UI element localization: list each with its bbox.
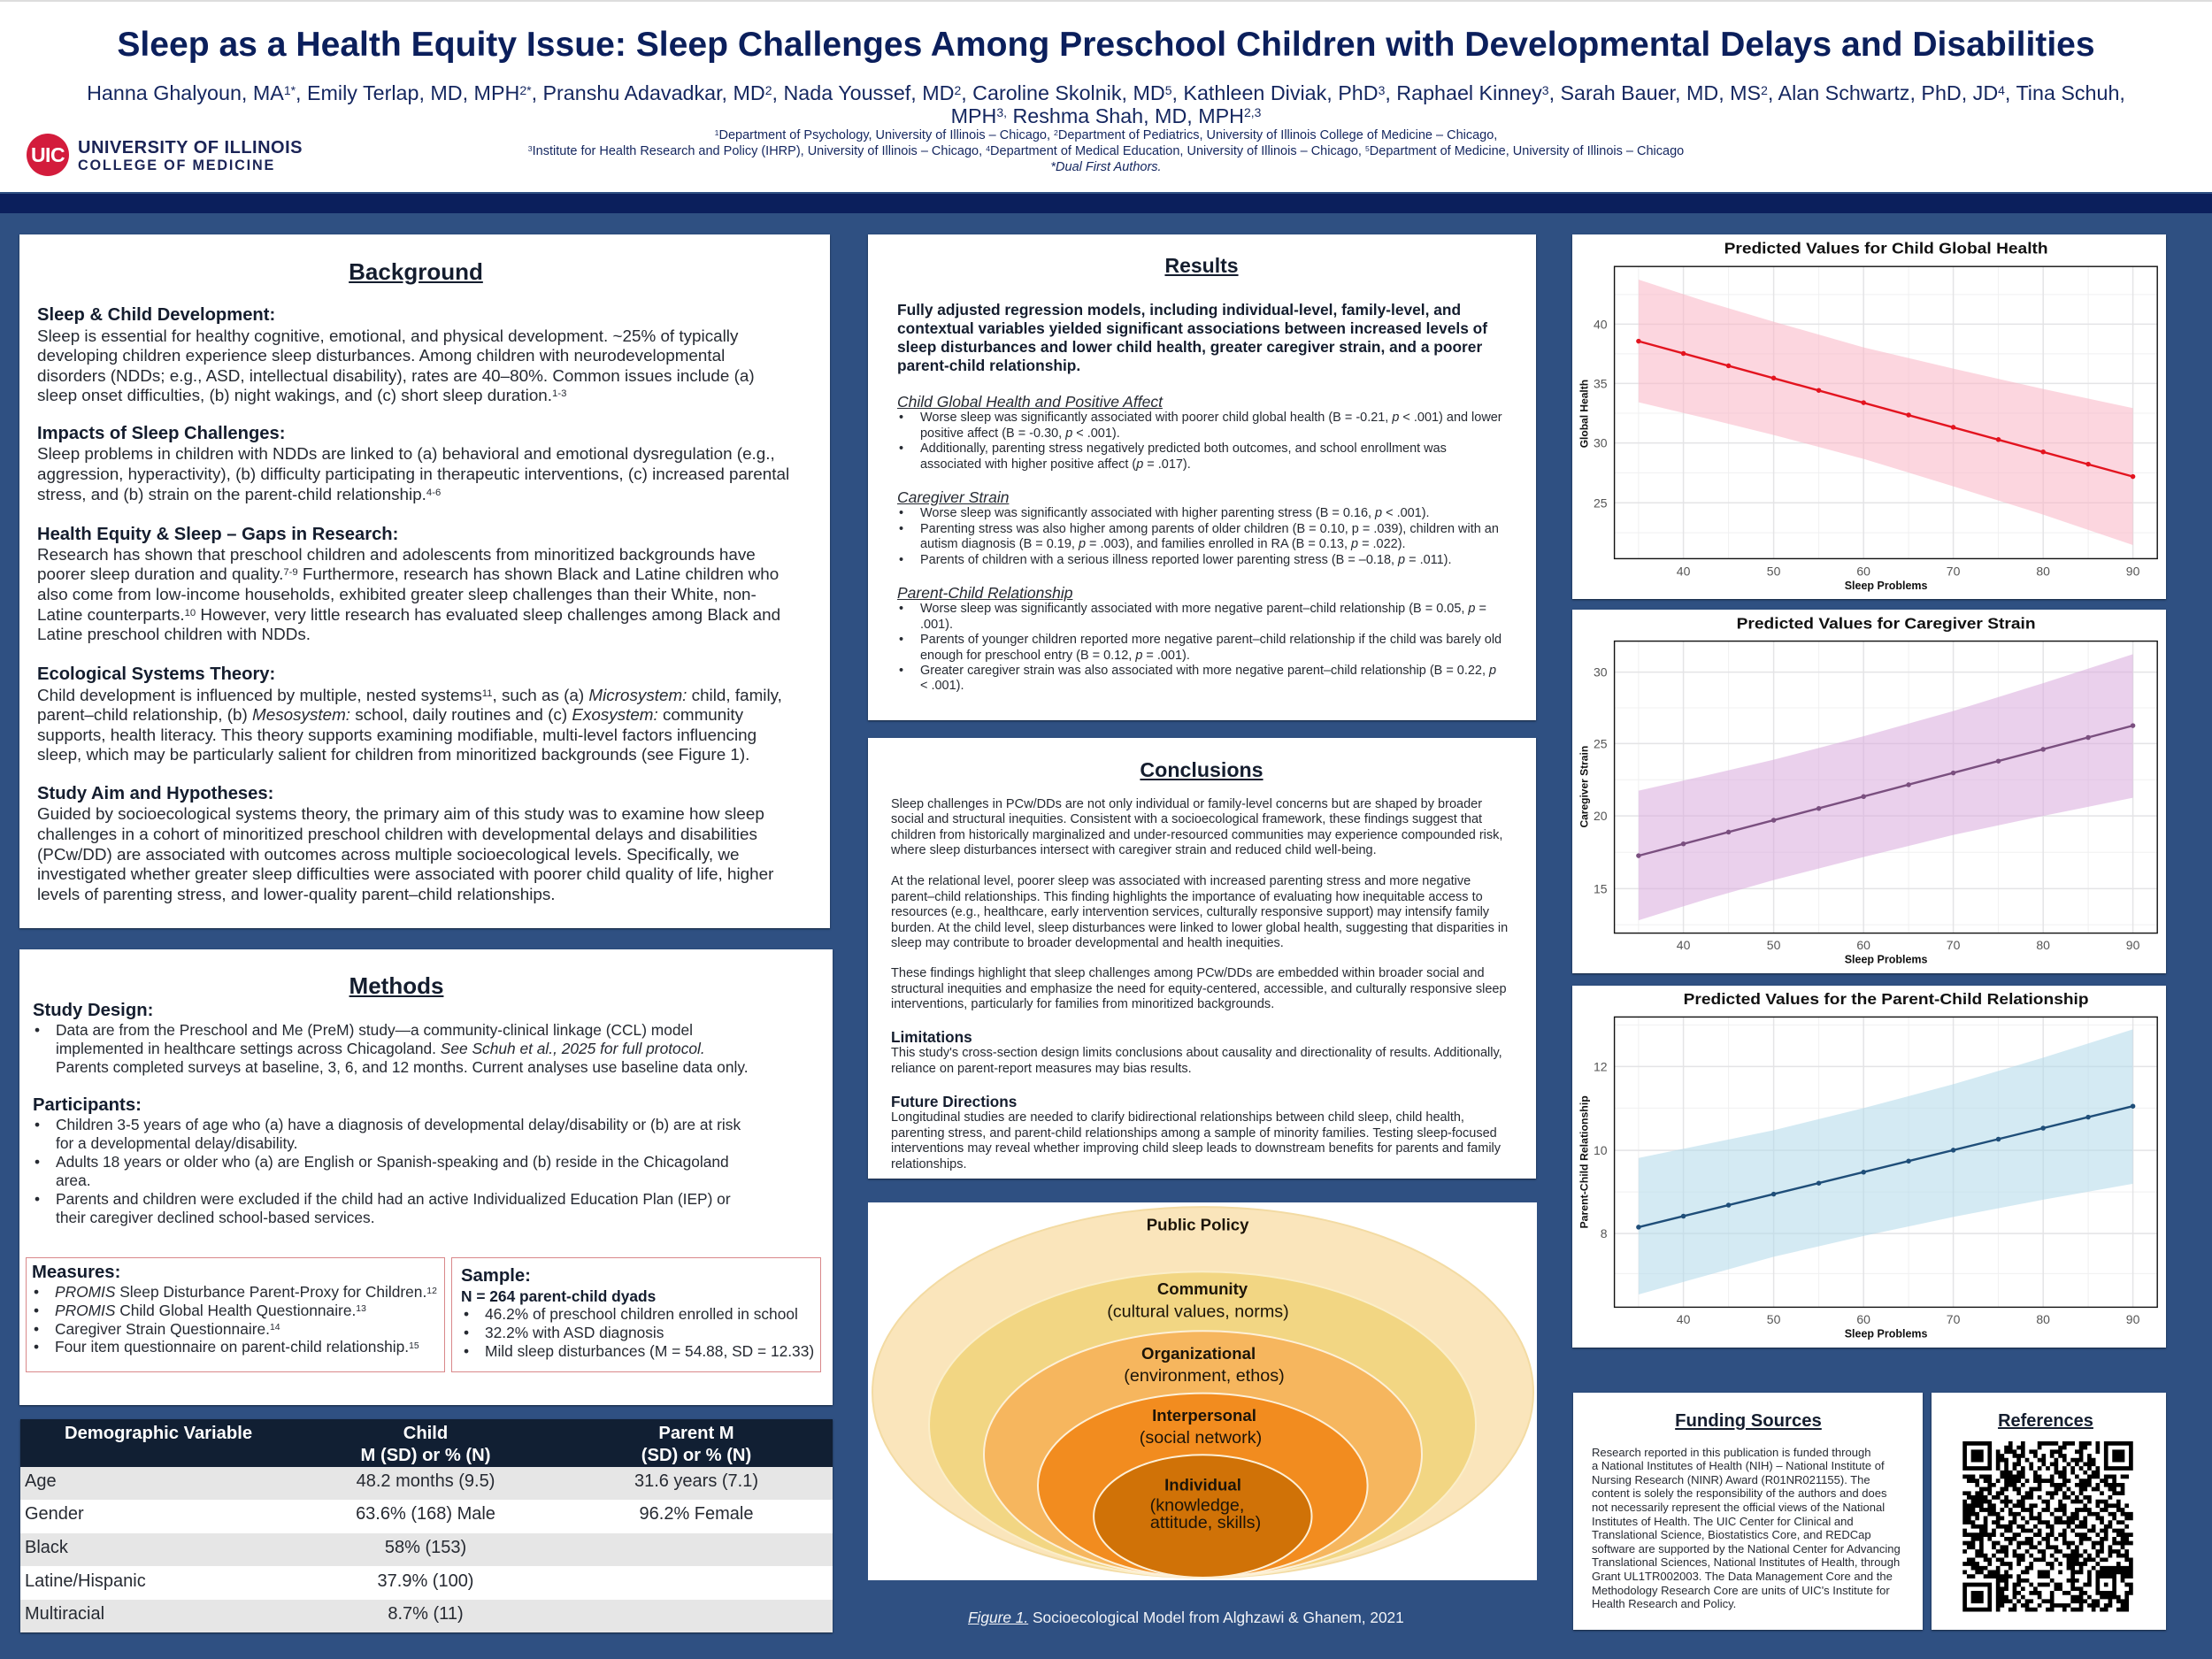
- text: participants: Parents and children were excluded if the child had an active Individualized Education Plan (IEP) or: [56, 1190, 731, 1208]
- box: measures: •: [34, 1320, 39, 1338]
- text: child global health findings: Worse sleep was significantly associated with poorer child global health (B = -0.21, p < .001) and lower: [920, 411, 1502, 425]
- panel: results: •: [899, 633, 903, 647]
- box: sample: •: [464, 1342, 469, 1360]
- panel: results: •: [899, 506, 903, 520]
- header band: [0, 0, 2212, 192]
- text: caregiver strain findings: Parenting stress was also higher among parents of older children (B = 0.10, p = .039), children with an: [920, 522, 1499, 536]
- text: results summary: sleep disturbances and lower child health, greater caregiver strain, and a poorer: [897, 338, 1482, 356]
- row: gender: 63.6% (168) Male: [356, 1504, 495, 1524]
- y axis title: Caregiver Strain: [1578, 746, 1591, 828]
- subheading: parent-child relationship: Parent-Child Relationship: [897, 584, 1072, 602]
- box: sample: •: [464, 1324, 469, 1341]
- text: parent-child findings: Greater caregiver strain was also associated with more negative parent–child relationship (B = 0.22, p: [920, 664, 1496, 678]
- panel: results: •: [899, 553, 903, 567]
- chart: parent-child relationship: [1572, 986, 2166, 1348]
- text: measures list: Four item questionnaire on parent-child relationship.15: [55, 1338, 419, 1356]
- text: conclusions paragraph 2: [891, 874, 1508, 950]
- text: sleep and child development: [37, 326, 755, 404]
- text: ecological systems: sleep, which may be particularly salient for children from minoritized backgrounds (see Figure 1).: [37, 745, 749, 764]
- ellipse: organizational: Organizational: [1141, 1344, 1256, 1363]
- chart: caregiver strain: [1572, 610, 2166, 973]
- box: measures: •: [34, 1338, 39, 1356]
- text: participants: Adults 18 years or older who (a) are English or Spanish-speaking and (b) reside in the Chicagoland: [56, 1153, 729, 1171]
- text: sample list: Mild sleep disturbances (M = 54.88, SD = 12.33): [485, 1342, 814, 1360]
- text: caregiver strain findings: autism diagnosis (B = 0.19, p = .003), and families enrolled in RA (B = 0.13, p = .022).: [920, 537, 1406, 551]
- text: sample list: [464, 1305, 814, 1360]
- text: participants: Children 3-5 years of age who (a) have a diagnosis of developmental delay/disability or (b) are at risk: [56, 1116, 741, 1133]
- y axis labels: 12: [1594, 1059, 1608, 1073]
- x axis labels: 80: [2037, 938, 2051, 952]
- subheading: study design: Study Design:: [33, 1001, 153, 1020]
- text: future directions: [891, 1110, 1501, 1171]
- y axis labels: 35: [1594, 377, 1608, 391]
- subheading: sleep and child development: Sleep & Child Development:: [37, 305, 275, 325]
- text: sleep and child development: Sleep is essential for healthy cognitive, emotional, and physical development. ~25% of typically: [37, 326, 738, 345]
- x axis title: Sleep Problems: [1845, 580, 1928, 592]
- text: conclusions paragraph 2: At the relational level, poorer sleep was associated with increased parenting stress and more negative: [891, 874, 1471, 888]
- text: future directions: relationships.: [891, 1157, 967, 1171]
- text: limitations: reliance on parent-report measures may bias results.: [891, 1062, 1192, 1076]
- text: funding: Health Research and Policy.: [1592, 1597, 1736, 1610]
- text: caregiver strain findings: [899, 506, 1499, 567]
- ellipse: individual: Individual: [1164, 1476, 1241, 1494]
- gridlines: [1615, 267, 2157, 558]
- text: measures list: PROMIS Child Global Health Questionnaire.13: [55, 1302, 366, 1319]
- x axis title: Sleep Problems: [1845, 954, 1928, 966]
- x axis labels: 80: [2037, 1312, 2051, 1326]
- text: results summary: [897, 301, 1488, 374]
- subheading: child global health: Child Global Health and Positive Affect: [897, 393, 1163, 411]
- text: future directions: interventions may reveal whether improving child sleep leads to downstream benefits for parents and family: [891, 1141, 1501, 1156]
- x axis labels: 70: [1947, 938, 1961, 952]
- panel: results: •: [899, 522, 903, 536]
- text: future directions: Longitudinal studies are needed to clarify bidirectional relationships between child sleep, child health,: [891, 1110, 1464, 1125]
- affiliations: 1Department of Psychology, University of Illinois – Chicago, 2Department of Pediatrics, University of Illinois College of Medicine – Chicago,: [715, 128, 1497, 142]
- subheading: study aim: Study Aim and Hypotheses:: [37, 784, 273, 803]
- regression line: [1639, 1106, 2133, 1226]
- text: sleep and child development: disorders (NDDs; e.g., ASD, intellectual disability), rates are 40–80%. Common issues include (a): [37, 366, 755, 385]
- text: parent-child findings: .001).: [920, 618, 953, 632]
- text: ecological systems: Child development is influenced by multiple, nested systems11, such as (a) Microsystem: child, family,: [37, 686, 782, 704]
- heading: conclusions: Conclusions: [1140, 758, 1263, 781]
- x axis labels: 50: [1767, 938, 1781, 952]
- text: study aim: levels of parenting stress, and lower-quality parent–child relationships.: [37, 885, 556, 903]
- row: black: Black: [25, 1538, 68, 1557]
- panel: results: •: [899, 602, 903, 616]
- row: latine: 37.9% (100): [378, 1571, 473, 1591]
- text: measures list: Caregiver Strain Questionnaire.14: [55, 1320, 280, 1338]
- x axis labels: 50: [1767, 1312, 1781, 1326]
- text: caregiver strain findings: Worse sleep was significantly associated with higher parenting stress (B = 0.16, p < .001).: [920, 506, 1430, 520]
- text: study design: [35, 1021, 749, 1076]
- text: funding: Institutes of Health. The UIC Center for Clinical and: [1592, 1515, 1854, 1528]
- text: conclusions paragraph 3: These findings highlight that sleep challenges among PCw/DDs are embedded within broader social and: [891, 966, 1485, 980]
- confidence band: [1639, 280, 2133, 545]
- row: gender: Gender: [25, 1504, 84, 1524]
- row: black: [20, 1533, 833, 1566]
- affiliations: 3Institute for Health Research and Policy (IHRP), University of Illinois – Chicago, 4Department of Medical Education, University of Illinois – Chicago, 5Department of Medicine, University of Illinois – Chicago: [528, 144, 1684, 158]
- caption: figure 1: Figure 1. Socioecological Model from Alghzawi & Ghanem, 2021: [968, 1609, 1404, 1626]
- text: measures list: [34, 1283, 437, 1356]
- text: funding: content is solely the responsibility of the authors and does: [1592, 1486, 1887, 1500]
- text: funding: not necessarily represent the official views of the National: [1592, 1501, 1885, 1514]
- y axis labels: [1594, 665, 1608, 896]
- plot frame: [1615, 267, 2158, 559]
- panel: methods: •: [35, 1153, 40, 1171]
- ellipse: individual: (knowledge,: [1150, 1496, 1244, 1516]
- ellipse: organizational: [984, 1332, 1422, 1578]
- logo wordmark line 2: COLLEGE OF MEDICINE: [78, 157, 275, 173]
- x axis title: Sleep Problems: [1845, 1327, 1928, 1340]
- chart title: Predicted Values for Caregiver Strain: [1737, 615, 2036, 633]
- table header: M (SD) or % (N): [361, 1446, 490, 1465]
- y axis labels: 15: [1594, 882, 1608, 896]
- text: parent-child findings: < .001).: [920, 679, 964, 693]
- text: child global health findings: [899, 411, 1502, 472]
- subheading: measures: Measures:: [32, 1263, 120, 1282]
- ellipse: interpersonal: [1038, 1394, 1368, 1578]
- heading: methods: Methods: [349, 972, 443, 999]
- text: funding: a National Institutes of Health (NIH) – National Institute of: [1592, 1459, 1885, 1472]
- panel: methods: [19, 949, 833, 1405]
- ellipse: interpersonal: (social network): [1140, 1428, 1262, 1448]
- text: study aim: challenges in a cohort of minoritized preschool children with developmental delays and disabilities: [37, 825, 757, 843]
- text: study design: Data are from the Preschool and Me (PreM) study—a community-clinical linkage (CCL) model: [56, 1021, 693, 1039]
- text: conclusions paragraph 2: parent–child relationships. This finding highlights the importance of evaluating how inequitable access to: [891, 890, 1483, 904]
- row: black: 58% (153): [385, 1538, 466, 1557]
- text: child global health findings: associated with higher positive affect (p = .017).: [920, 457, 1191, 472]
- text: limitations: This study's cross-section design limits conclusions about causality and directionality of results. Additionally,: [891, 1046, 1502, 1060]
- text: health equity: poorer sleep duration and quality.7-9 Furthermore, research has shown Black and Latine children who: [37, 565, 779, 583]
- text: funding: Nursing Research (NINR) Award (R01NR021155). The: [1592, 1473, 1870, 1486]
- text: health equity: Research has shown that preschool children and adolescents from minoritized backgrounds have: [37, 545, 756, 564]
- chart: child global health: [1572, 234, 2166, 599]
- ellipse: individual: [1094, 1455, 1312, 1578]
- ellipse: public policy: [872, 1207, 1533, 1578]
- row: gender: [25, 1504, 753, 1524]
- text: sample list: 46.2% of preschool children enrolled in school: [485, 1305, 798, 1323]
- panel: results: •: [899, 664, 903, 678]
- plot frame: [1615, 1017, 2158, 1307]
- y axis labels: [1594, 1059, 1608, 1240]
- x axis labels: [1677, 1312, 2140, 1326]
- text: conclusions paragraph 1: where sleep disturbances intersect with caregiver strain and reduced child well-being.: [891, 843, 1377, 857]
- logo wordmark line 1: UNIVERSITY OF ILLINOIS: [78, 138, 303, 157]
- row: gender: 96.2% Female: [640, 1504, 753, 1524]
- text: child global health findings: positive affect (B = -0.30, p < .001).: [920, 426, 1120, 441]
- text: study aim: Guided by socioecological systems theory, the primary aim of this study was to examine how sleep: [37, 804, 764, 823]
- text: health equity: Latine counterparts.10 However, very little research has evaluated sleep challenges among Black and: [37, 605, 780, 624]
- box: sample: •: [464, 1305, 469, 1323]
- row: age: Age: [25, 1471, 57, 1491]
- text: conclusions paragraph 3: [891, 966, 1507, 1011]
- subheading: limitations: Limitations: [891, 1028, 972, 1046]
- authors: MPH3, Reshma Shah, MD, MPH2,3: [951, 104, 1261, 127]
- box: measures: •: [34, 1302, 39, 1319]
- x axis labels: 70: [1947, 1312, 1961, 1326]
- text: conclusions paragraph 1: [891, 797, 1502, 857]
- plot frame: [1615, 641, 2158, 933]
- x axis labels: 80: [2037, 565, 2051, 579]
- text: impacts: Sleep problems in children with NDDs are linked to (a) behavioral and emotional dysregulation (e.g.,: [37, 444, 775, 463]
- y axis labels: 20: [1594, 809, 1608, 823]
- text: ecological systems: supports, health literacy. This theory supports examining modifiable, multi-level factors influencing: [37, 726, 757, 744]
- text: participants: their caregiver declined school-based services.: [56, 1209, 375, 1226]
- y axis labels: 30: [1594, 436, 1608, 450]
- table: demographics: [20, 1419, 833, 1632]
- text: health equity: [37, 545, 780, 643]
- gridlines: [1615, 1017, 2157, 1307]
- text: impacts: aggression, hyperactivity), (b) difficulty participating in therapeutic interventions, (c) increased parental: [37, 465, 789, 483]
- panel: background: [19, 234, 830, 928]
- x axis labels: 40: [1677, 938, 1691, 952]
- subheading: impacts: Impacts of Sleep Challenges:: [37, 424, 285, 443]
- x axis labels: [1677, 565, 2140, 579]
- panel: methods: •: [35, 1021, 40, 1039]
- panel: methods: •: [35, 1116, 40, 1133]
- regression line: [1639, 342, 2133, 477]
- logo: UIC College of Medicine: [27, 134, 303, 176]
- text: funding: software are supported by the National Center for Advancing: [1592, 1542, 1901, 1555]
- text: parent-child findings: Worse sleep was significantly associated with more negative parent–child relationship (B = 0.05, p =: [920, 602, 1486, 616]
- text: funding: Translational Sciences, National Institutes of Health, through: [1592, 1555, 1900, 1569]
- text: sleep and child development: sleep onset difficulties, (b) night wakings, and (c) short sleep duration.1-3: [37, 386, 566, 404]
- text: impacts: [37, 444, 789, 503]
- x axis labels: [1677, 938, 2140, 952]
- text: conclusions paragraph 2: sleep may contribute to broader developmental and health inequities.: [891, 936, 1284, 950]
- text: limitations: [891, 1046, 1502, 1076]
- x axis labels: 40: [1677, 1312, 1691, 1326]
- box: measures: •: [34, 1283, 39, 1301]
- row: multiracial: 8.7% (11): [388, 1604, 464, 1624]
- subheading: sample: Sample:: [461, 1266, 531, 1286]
- y axis labels: 10: [1594, 1143, 1608, 1157]
- x axis labels: 90: [2126, 1312, 2140, 1326]
- text: study design: implemented in healthcare settings across Chicagoland. See Schuh et al., 2025 for full protocol.: [56, 1040, 705, 1057]
- text: ecological systems: parent–child relationship, (b) Mesosystem: school, daily routines and (c) Exosystem: community: [37, 705, 743, 724]
- text: conclusions paragraph 1: social and structural inequities. Consistent with a socioecological framework, these findings suggest that: [891, 812, 1482, 826]
- text: conclusions paragraph 3: interventions, particularly for families from minoritized backgrounds.: [891, 997, 1274, 1011]
- y axis labels: 40: [1594, 318, 1608, 332]
- panel: references: [1932, 1393, 2166, 1630]
- text: parent-child findings: Parents of younger children reported more negative parent–child relationship if the child was barely old: [920, 633, 1502, 647]
- text: conclusions paragraph 1: Sleep challenges in PCw/DDs are not only individual or family-level concerns but are shaped by broader: [891, 797, 1482, 811]
- icon: UIC red circle: UIC: [31, 143, 65, 166]
- panel: methods: •: [35, 1190, 40, 1208]
- text: child global health findings: Additionally, parenting stress negatively predicted both outcomes, and school enrollment was: [920, 442, 1447, 456]
- y axis labels: 8: [1601, 1226, 1608, 1240]
- affiliations: [528, 128, 1684, 174]
- text: funding: Methodology Research Core are units of UIC's Institute for: [1592, 1584, 1890, 1597]
- text: participants: area.: [56, 1171, 91, 1189]
- gridlines: [1615, 641, 2157, 933]
- text: sample size: N = 264 parent-child dyads: [461, 1287, 656, 1305]
- text: sleep and child development: developing children experience sleep disturbances. Among children with neurodevelopmental: [37, 346, 725, 365]
- chart title: Predicted Values for Child Global Health: [1724, 240, 2048, 257]
- text: ecological systems: [37, 686, 782, 764]
- text: funding: Grant UL1TR002003. The Data Management Core and the: [1592, 1570, 1893, 1583]
- confidence band: [1639, 655, 2133, 920]
- heading: background: Background: [349, 258, 483, 285]
- box: sample: [451, 1257, 821, 1372]
- text: results summary: Fully adjusted regression models, including individual-level, family-level, and: [897, 301, 1461, 319]
- text: future directions: parenting stress, and parent-child relationships among a sample of minority families. Testing sleep-focused: [891, 1126, 1497, 1141]
- title: Sleep as a Health Equity Issue: Sleep Challenges Among Preschool Children with Developmental Delays and Disabilities: [117, 26, 2095, 64]
- text: conclusions paragraph 3: structural inequities and emphasize the need for equity-centered, accessible, and culturally responsive sleep: [891, 982, 1507, 996]
- text: parent-child findings: enough for preschool entry (B = 0.12, p = .001).: [920, 649, 1190, 663]
- text: health equity: Latine preschool children with NDDs.: [37, 625, 311, 643]
- row: age: 48.2 months (9.5): [357, 1471, 495, 1491]
- row: multiracial: [20, 1600, 833, 1632]
- heading: references: References: [1998, 1411, 2093, 1431]
- text: impacts: stress, and (b) strain on the parent-child relationship.4-6: [37, 485, 441, 503]
- x axis labels: 70: [1947, 565, 1961, 579]
- text: funding: [1592, 1446, 1901, 1610]
- y axis title: Global Health: [1578, 380, 1591, 449]
- text: health equity: also come from low-income households, exhibited greater sleep challenges than their White, non-: [37, 585, 757, 603]
- row: multiracial: Multiracial: [25, 1604, 104, 1624]
- confidence band: [1639, 1029, 2133, 1294]
- text: funding: Research reported in this publication is funded through: [1592, 1446, 1870, 1459]
- icon: QR code: [1962, 1441, 2133, 1612]
- text: conclusions paragraph 1: children from historically marginalized and under-resourced communities may experience compounded risk,: [891, 828, 1502, 842]
- y axis labels: 25: [1594, 496, 1608, 511]
- x axis labels: 90: [2126, 565, 2140, 579]
- text: caregiver strain findings: Parents of children with a serious illness reported lower parenting stress (B = –0.18, p = .011).: [920, 553, 1452, 567]
- text: study aim: (PCw/DD) are associated with outcomes across multiple socioecological levels. Specifically, we: [37, 845, 740, 864]
- chart title: Predicted Values for the Parent-Child Relationship: [1684, 990, 2089, 1008]
- text: results summary: contextual variables yielded significant associations between increased levels of: [897, 319, 1487, 337]
- text: study design: Parents completed surveys at baseline, 3, 6, and 12 months. Current analyses use baseline data only.: [56, 1058, 749, 1076]
- panel: socioecological model figure: [868, 1202, 1537, 1580]
- ellipse: individual: attitude, skills): [1150, 1513, 1261, 1532]
- text: conclusions paragraph 2: burden. At the child level, sleep disturbances were linked to lower global health, suggesting that disparities in: [891, 921, 1508, 935]
- authors: Hanna Ghalyoun, MA1*, Emily Terlap, MD, MPH2*, Pranshu Adavadkar, MD2, Nada Youssef, MD2, Caroline Skolnik, MD5, Kathleen Diviak, PhD3, Raphael Kinney3, Sarah Bauer, MD, MS2, Alan Schwartz, PhD, JD4, Tina Schuh,: [87, 81, 2125, 104]
- text: measures list: PROMIS Sleep Disturbance Parent-Proxy for Children.12: [55, 1283, 437, 1301]
- table header: Child: [403, 1423, 448, 1442]
- ellipse: community: Community: [1157, 1279, 1248, 1298]
- table header: [20, 1419, 833, 1467]
- text: participants: for a developmental delay/disability.: [56, 1134, 297, 1152]
- x axis labels: 50: [1767, 565, 1781, 579]
- authors: [87, 81, 2125, 127]
- y axis title: Parent-Child Relationship: [1578, 1095, 1591, 1228]
- table header: (SD) or % (N): [641, 1446, 751, 1465]
- ellipse: interpersonal: Interpersonal: [1152, 1406, 1256, 1425]
- y axis labels: 30: [1594, 665, 1608, 680]
- text: funding: Translational Science, Biostatistics Core, and REDCap: [1592, 1528, 1871, 1541]
- ellipse: community: [929, 1272, 1476, 1578]
- table header: Parent M: [658, 1423, 734, 1442]
- row: latine: Latine/Hispanic: [25, 1571, 146, 1591]
- panel: results: •: [899, 411, 903, 425]
- table header: Demographic Variable: [65, 1423, 252, 1442]
- panel: results: [868, 234, 1536, 720]
- panel: conclusions: [868, 738, 1536, 1179]
- x axis labels: 40: [1677, 565, 1691, 579]
- ellipse: public policy: Public Policy: [1147, 1216, 1249, 1234]
- regression line: [1639, 726, 2133, 856]
- x axis labels: 90: [2126, 938, 2140, 952]
- text: parent-child findings: [899, 602, 1502, 693]
- row: age: [20, 1467, 833, 1500]
- text: sample list: 32.2% with ASD diagnosis: [485, 1324, 664, 1341]
- subheading: future directions: Future Directions: [891, 1093, 1017, 1110]
- ellipse: community: (cultural values, norms): [1107, 1302, 1289, 1322]
- x axis labels: 60: [1857, 565, 1871, 579]
- y axis labels: 25: [1594, 737, 1608, 751]
- x axis labels: 60: [1857, 1312, 1871, 1326]
- affiliations: *Dual First Authors.: [1050, 160, 1162, 174]
- row: latine: [25, 1571, 473, 1591]
- subheading: caregiver strain: Caregiver Strain: [897, 488, 1009, 506]
- row: age: 31.6 years (7.1): [634, 1471, 758, 1491]
- x axis labels: 60: [1857, 938, 1871, 952]
- ellipse: organizational: (environment, ethos): [1124, 1366, 1285, 1386]
- text: conclusions paragraph 2: resources (e.g., healthcare, early intervention services, culturally responsive support) may intensify family: [891, 905, 1489, 919]
- heading: results: Results: [1164, 254, 1239, 277]
- heading: funding sources: Funding Sources: [1675, 1411, 1822, 1431]
- icon: UIC red circle: [27, 134, 69, 176]
- box: measures: [26, 1257, 445, 1372]
- panel: results: •: [899, 442, 903, 456]
- text: results summary: parent-child relationship.: [897, 357, 1080, 374]
- navy band: [0, 194, 2212, 213]
- subheading: health equity: Health Equity & Sleep – Gaps in Research:: [37, 524, 398, 543]
- text: participants: [35, 1116, 741, 1226]
- text: study aim: [37, 804, 773, 903]
- panel: funding sources: [1573, 1393, 1923, 1630]
- subheading: ecological systems: Ecological Systems Theory:: [37, 664, 275, 684]
- subheading: participants: Participants:: [33, 1095, 142, 1115]
- y axis labels: [1594, 318, 1608, 511]
- text: study aim: investigated whether greater sleep difficulties were associated with poorer child quality of life, higher: [37, 864, 773, 883]
